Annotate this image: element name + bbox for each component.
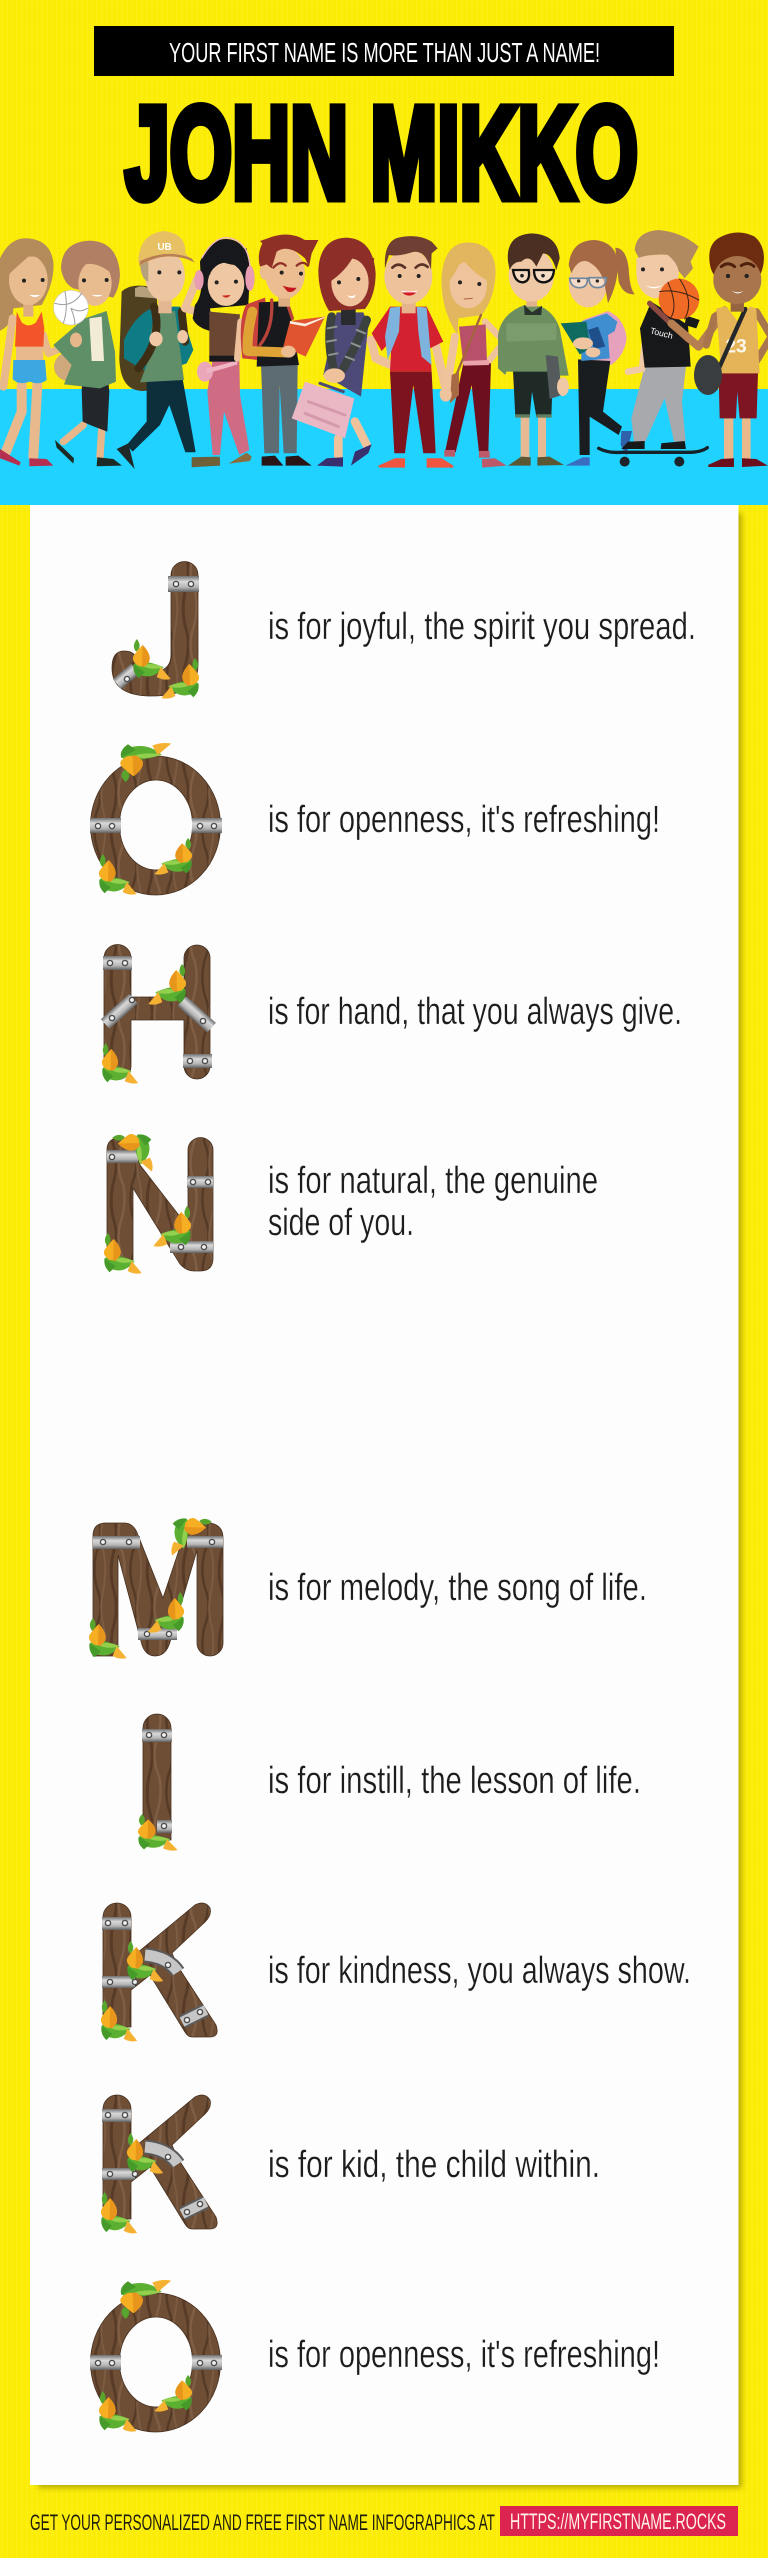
person 12: boy in yellow jersey [694, 232, 768, 467]
row: letter K second [101, 2095, 600, 2233]
row: letter N [104, 1134, 598, 1274]
floor band [0, 389, 768, 505]
person 3: hiker with cap and backpack: UB [157, 242, 172, 253]
row: letter I [138, 1714, 641, 1851]
person 7: boy in red t-shirt [371, 236, 453, 468]
person 10: girl with ponytail and tablet [561, 240, 635, 466]
person 2: girl with volleyball [53, 241, 122, 466]
person 5: boy with red backpack and book [241, 235, 325, 466]
row: letter H [101, 945, 682, 1084]
lines N: side of you. [268, 1202, 414, 1244]
row: letter M [89, 1518, 647, 1659]
white content panel [30, 505, 742, 2488]
row: letter O second [90, 2280, 660, 2432]
row: letter K [101, 1903, 691, 2041]
wooden letter J [112, 562, 199, 699]
lines N [268, 1160, 598, 1244]
wooden letter K [101, 2095, 217, 2233]
person 1: girl in orange top [0, 238, 78, 466]
wooden letter H [101, 945, 216, 1084]
lines N: is for natural, the genuine [268, 1160, 598, 1202]
footer [30, 2506, 738, 2536]
person 9: boy with glasses and folder [498, 233, 569, 466]
person 11: skateboarder with basketball: Touch [649, 326, 674, 341]
wooden letter K [101, 1903, 217, 2041]
tagline bar [94, 26, 674, 76]
line M: is for melody, the song of life. [268, 1567, 647, 1609]
person 3: hiker with cap and backpack [117, 231, 220, 469]
person 4: girl with headphones [185, 238, 255, 466]
wooden letter M [89, 1518, 223, 1659]
person 8: blonde girl with shoulder bag [440, 242, 507, 468]
line O second: is for openness, it's refreshing! [268, 2334, 660, 2376]
line I: is for instill, the lesson of life. [268, 1760, 641, 1802]
person 11: skateboarder with basketball [599, 230, 715, 467]
row: letter J [112, 562, 696, 699]
wooden letter O [90, 743, 222, 895]
row: letter O [90, 743, 660, 895]
line K second: is for kid, the child within. [268, 2144, 600, 2186]
person 6: girl with pink bag [292, 238, 376, 467]
wooden letter O [90, 2280, 222, 2432]
wooden letter N [104, 1134, 213, 1274]
illustration: group of twelve young people [0, 230, 768, 469]
wooden letter I [138, 1714, 178, 1851]
person 12: boy in yellow jersey: 23 [725, 336, 747, 357]
line O: is for openness, it's refreshing! [268, 799, 660, 841]
footer text: GET YOUR PERSONALIZED AND FREE FIRST NAME INFOGRAPHICS AT [30, 2510, 495, 2535]
